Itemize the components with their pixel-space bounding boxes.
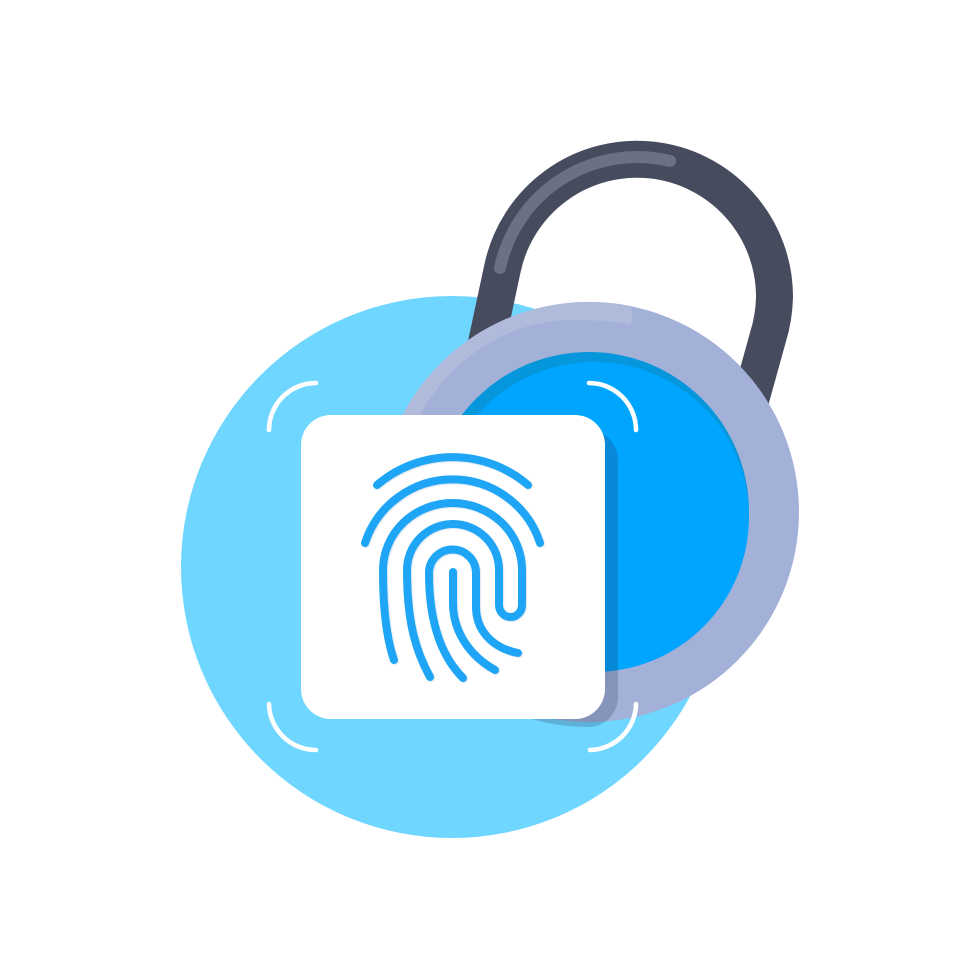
icon: padlock body	[379, 302, 799, 722]
inner circle	[439, 362, 749, 672]
icon: fingerprint	[365, 457, 540, 678]
icon: padlock shackle	[478, 157, 775, 420]
inner circle dark edge	[429, 352, 749, 672]
body ring	[379, 302, 799, 722]
scanner corner brackets	[269, 383, 636, 750]
shackle highlight	[500, 157, 670, 268]
fingerprint card	[301, 415, 605, 719]
ring highlight	[402, 302, 632, 416]
background circle	[181, 296, 723, 838]
illustration: fingerprint padlock	[181, 140, 799, 838]
card shadow	[532, 434, 618, 727]
